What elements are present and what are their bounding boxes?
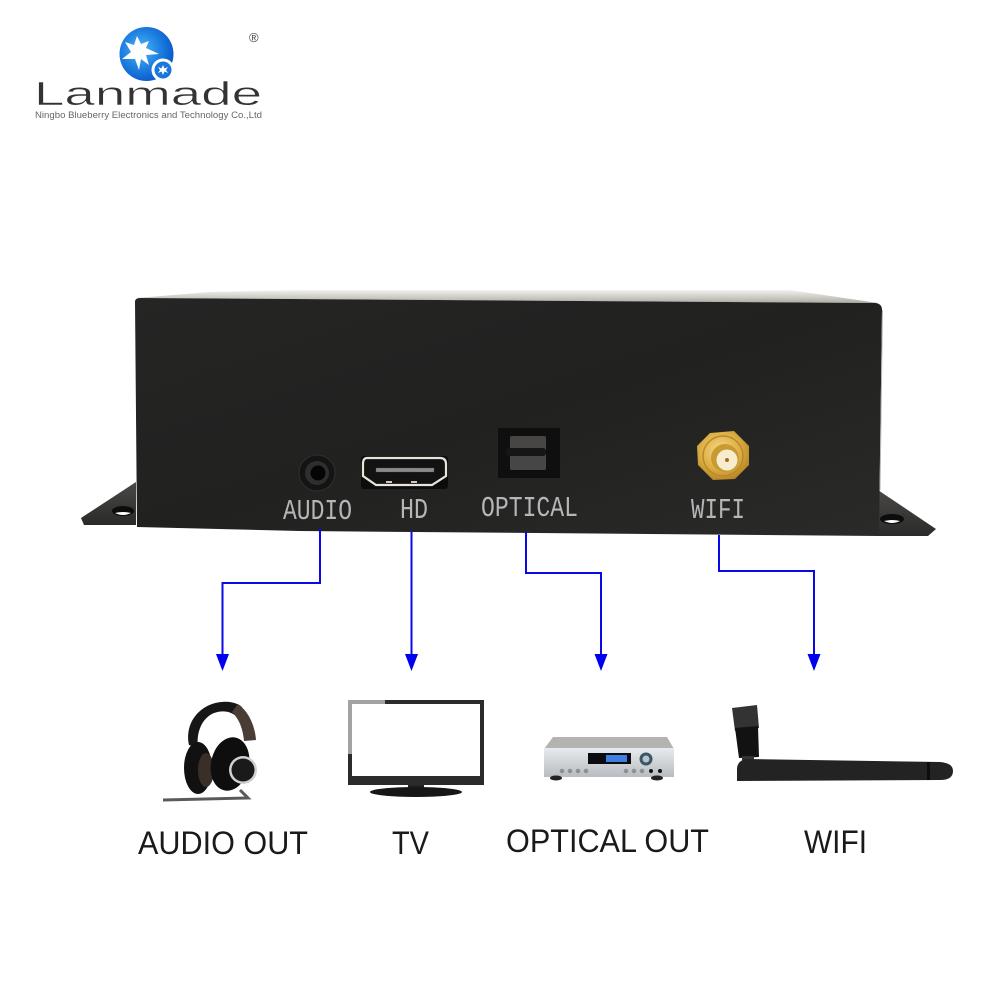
right mounting flange xyxy=(878,490,936,536)
arrow: audio to headphones xyxy=(216,529,320,671)
arrow: optical to amplifier xyxy=(526,532,608,671)
icon: headphones xyxy=(163,702,257,800)
device: black box xyxy=(81,290,936,536)
registered mark: ® xyxy=(249,30,259,45)
port label: WIFI: WIFI xyxy=(691,494,745,527)
port label: HD: HD xyxy=(400,494,428,527)
port: audio jack xyxy=(299,455,335,491)
port: optical xyxy=(498,428,560,478)
top face xyxy=(137,290,878,303)
port: WIFI SMA gold connector xyxy=(697,431,749,480)
label: AUDIO OUT: AUDIO OUT xyxy=(138,825,308,861)
label: WIFI: WIFI xyxy=(804,824,867,860)
arrow: HD to TV xyxy=(405,531,418,671)
logo: Lanmade xyxy=(34,27,262,121)
port label: OPTICAL: OPTICAL xyxy=(481,492,578,525)
port: HDMI xyxy=(361,456,448,489)
front face xyxy=(135,298,882,536)
logo wordmark: Lanmade xyxy=(34,75,262,112)
logo icon: blue star circle xyxy=(120,27,174,82)
label: OPTICAL OUT: OPTICAL OUT xyxy=(506,823,709,859)
logo company line: Ningbo Blueberry Electronics and Technology Co.,Ltd xyxy=(35,110,262,121)
arrow: WIFI to antenna xyxy=(719,535,820,671)
label: TV: TV xyxy=(392,825,430,861)
port label: AUDIO: AUDIO xyxy=(283,495,352,528)
icon: WIFI antenna xyxy=(732,705,953,781)
icon: TV xyxy=(348,700,484,797)
left mounting flange xyxy=(81,482,136,525)
icon: optical amplifier xyxy=(544,737,674,780)
